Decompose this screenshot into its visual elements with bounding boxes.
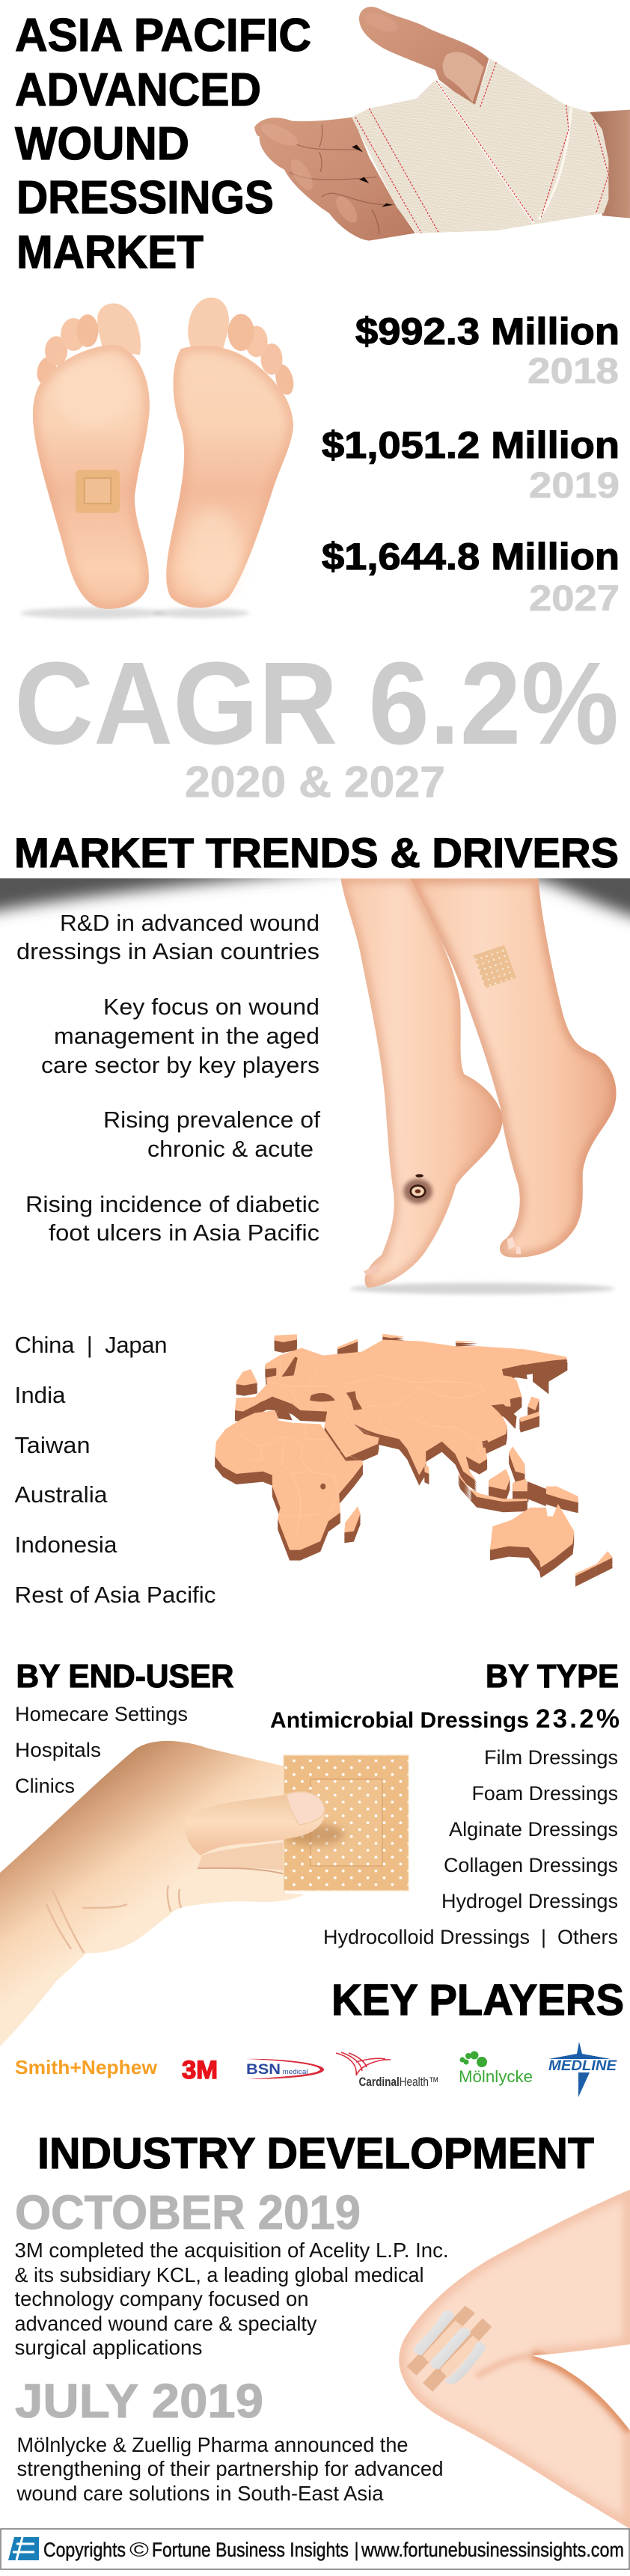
footer: | — [354, 2539, 359, 2561]
development: October 2019: surgical applications — [15, 2336, 202, 2359]
region list: Taiwan — [15, 1432, 91, 1458]
end-user list: Homecare Settings — [15, 1703, 188, 1725]
icon: legs with wound and patch — [340, 878, 617, 1294]
market value 2027: $1,644.8 Million — [322, 536, 620, 578]
logo: Medline: MEDLINE — [548, 2058, 617, 2074]
title: WOUND — [15, 118, 189, 170]
market value 2018: $992.3 Million — [355, 310, 620, 352]
gauze — [414, 2310, 486, 2384]
front leg — [340, 878, 502, 1288]
region list — [15, 1332, 215, 1608]
icon: FBI logo — [8, 2537, 39, 2560]
title: DRESSINGS — [16, 172, 274, 224]
logo: BSN medical: BSN — [246, 2062, 281, 2078]
type list: Hydrogel Dressings — [441, 1890, 618, 1912]
heading: by type: BY TYPE — [486, 1658, 619, 1695]
driver: diabetic foot ulcers — [25, 1191, 319, 1246]
development: October 2019: OCTOBER 2019 — [15, 2185, 361, 2239]
region list: China | Japan — [15, 1332, 168, 1358]
type list: Alginate Dressings — [449, 1818, 618, 1841]
heading: key players: KEY PLAYERS — [331, 1976, 624, 2025]
leg patch — [474, 945, 516, 988]
logo: Smith+Nephew: Smith+Nephew — [15, 2056, 158, 2078]
driver: wound management: management in the aged — [54, 1023, 319, 1049]
plaster strips — [406, 2306, 492, 2392]
icon: feet with patch — [20, 298, 296, 619]
type list: Antimicrobial Dressings — [270, 1708, 529, 1733]
logo: Medline — [548, 2042, 617, 2097]
CAGR: 2020 & 2027 — [185, 758, 445, 807]
left foot — [33, 304, 150, 609]
development: July 2019 — [15, 2374, 443, 2505]
region list: Rest of Asia Pacific — [15, 1582, 215, 1608]
market value 2027 — [322, 536, 620, 619]
driver: R&D — [16, 910, 319, 964]
title: ADVANCED — [15, 64, 261, 116]
logos — [15, 2042, 617, 2097]
driver: R&D: R&D in advanced wound — [60, 910, 319, 936]
icon: bandaged knee — [399, 2190, 630, 2529]
type list: Film Dressings — [484, 1746, 618, 1769]
map — [215, 1334, 613, 1587]
driver: wound management: care sector by key players — [41, 1052, 319, 1078]
title: ASIA PACIFIC — [15, 10, 311, 61]
driver: chronic prevalence — [103, 1107, 320, 1162]
development: July 2019: Mölnlycke & Zuellig Pharma announced the — [16, 2433, 409, 2456]
development: October 2019: technology company focused on — [15, 2287, 308, 2310]
development: October 2019: & its subsidiary KCL, a leading global medical — [15, 2263, 423, 2286]
driver: wound management: Key focus on wound — [103, 994, 319, 1020]
driver: wound management — [41, 994, 319, 1078]
icon: hand holding patch — [0, 1741, 409, 2046]
trends list — [16, 910, 320, 1246]
development: October 2019 — [15, 2185, 449, 2359]
market value 2019 — [322, 424, 620, 506]
driver: chronic prevalence: Rising prevalence of — [103, 1107, 320, 1133]
logo: 3M: 3M — [182, 2056, 218, 2084]
driver: diabetic foot ulcers: Rising incidence of diabetic — [25, 1191, 319, 1217]
type list — [270, 1704, 620, 1948]
heading: industry development: INDUSTRY DEVELOPMENT — [37, 2129, 594, 2178]
right foot — [166, 298, 296, 608]
title: MARKET — [16, 227, 204, 278]
type list: Hydrocolloid Dressings | Others — [323, 1926, 618, 1948]
region list: Indonesia — [15, 1532, 117, 1558]
logo: Mölnlycke: Mölnlycke — [459, 2067, 533, 2086]
development: October 2019: advanced wound care & specialty — [15, 2312, 317, 2335]
market value 2018 — [355, 310, 620, 391]
type list: Collagen Dressings — [444, 1854, 618, 1876]
icon: bandaged hand — [254, 7, 630, 241]
type list: Foam Dressings — [471, 1782, 618, 1805]
logo: BSN medical — [246, 2059, 324, 2079]
back leg — [410, 878, 617, 1258]
end-user list: Clinics — [15, 1775, 75, 1797]
driver: R&D: dressings in Asian countries — [16, 938, 319, 964]
heading: by end-user: BY END-USER — [16, 1658, 233, 1695]
driver: diabetic foot ulcers: foot ulcers in Asia Pacific — [49, 1220, 319, 1246]
logo: BSN medical: medical — [283, 2068, 308, 2075]
footer: Fortune Business Insights — [152, 2539, 349, 2561]
end-user list — [15, 1703, 188, 1797]
logo: Mölnlycke — [459, 2052, 533, 2086]
footer: Copyrights — [43, 2539, 126, 2561]
market value 2019: $1,051.2 Million — [322, 424, 620, 466]
region list: India — [15, 1382, 66, 1408]
patch — [284, 1755, 409, 1891]
end-user list: Hospitals — [15, 1739, 101, 1761]
type list: 23.2% — [536, 1704, 620, 1734]
patch — [76, 470, 120, 513]
development: July 2019: wound care solutions in South-East Asia — [16, 2482, 384, 2505]
driver: chronic prevalence: chronic & acute — [147, 1136, 314, 1162]
logo: Cardinal Health: CardinalHealth™ — [359, 2075, 438, 2089]
market value 2027: 2027 — [529, 579, 620, 619]
development: October 2019: 3M completed the acquisition of Acelity L.P. Inc. — [15, 2239, 449, 2262]
footer: © — [129, 2539, 149, 2561]
heading: market trends and drivers: MARKET TRENDS & DRIVERS — [14, 829, 619, 876]
title — [15, 10, 311, 278]
development: July 2019: JULY 2019 — [15, 2374, 263, 2428]
logo: Cardinal Health — [336, 2052, 438, 2089]
region list: Australia — [15, 1481, 108, 1508]
footer — [1, 2529, 629, 2569]
market value 2019: 2019 — [529, 466, 620, 506]
development: July 2019: strengthening of their partnership for advanced — [16, 2457, 443, 2480]
wound — [403, 1174, 432, 1204]
market value 2018: 2018 — [527, 352, 619, 391]
